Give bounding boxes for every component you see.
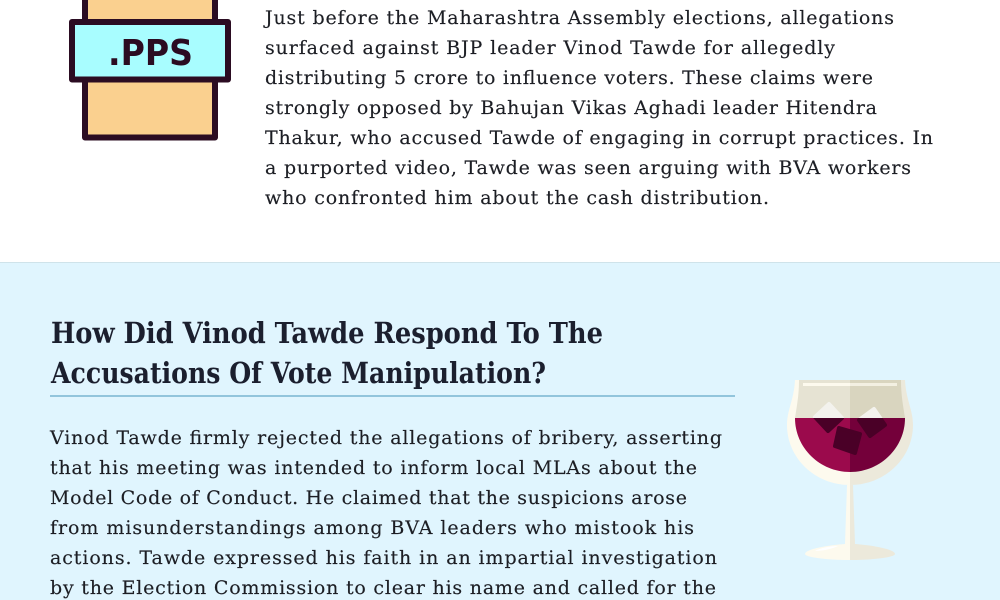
text block: response paragraph: that his meeting was intended to inform local MLAs about the (50, 457, 697, 479)
icon: PPS file (72, 0, 228, 138)
text block: allegations paragraph: distributing 5 crore to influence voters. These claims were (265, 67, 873, 89)
text block: response paragraph (49, 427, 722, 599)
panel: response section background (0, 262, 1000, 600)
text block: allegations paragraph: Just before the Maharashtra Assembly elections, allegations (263, 7, 894, 29)
text block: allegations paragraph (263, 7, 933, 209)
text block: allegations paragraph: strongly opposed by Bahujan Vikas Aghadi leader Hitendra (265, 97, 877, 119)
heading: response question: Accusations Of Vote Manipulation? (50, 356, 546, 390)
icon: wine glass (787, 380, 913, 560)
heading: response question (50, 316, 603, 390)
text block: response paragraph: Model Code of Conduct. He claimed that the suspicions arose (50, 487, 687, 509)
text block: response paragraph: actions. Tawde expressed his faith in an impartial investigation (50, 547, 717, 569)
text block: response paragraph: by the Election Commission to clear his name and called for the (50, 577, 716, 599)
text block: allegations paragraph: Thakur, who accused Tawde of engaging in corrupt practices. In (265, 127, 933, 149)
text block: response paragraph: from misunderstandings among BVA leaders who mistook his (50, 517, 694, 539)
icon: PPS file: .PPS (108, 33, 193, 74)
text block: allegations paragraph: surfaced against BJP leader Vinod Tawde for allegedly (265, 37, 835, 59)
text block: allegations paragraph: who confronted him about the cash distribution. (265, 187, 769, 209)
text block: response paragraph: Vinod Tawde firmly rejected the allegations of bribery, asserting (49, 427, 722, 449)
heading: response question: How Did Vinod Tawde Respond To The (51, 316, 603, 350)
text block: allegations paragraph: a purported video, Tawde was seen arguing with BVA workers (265, 157, 911, 179)
